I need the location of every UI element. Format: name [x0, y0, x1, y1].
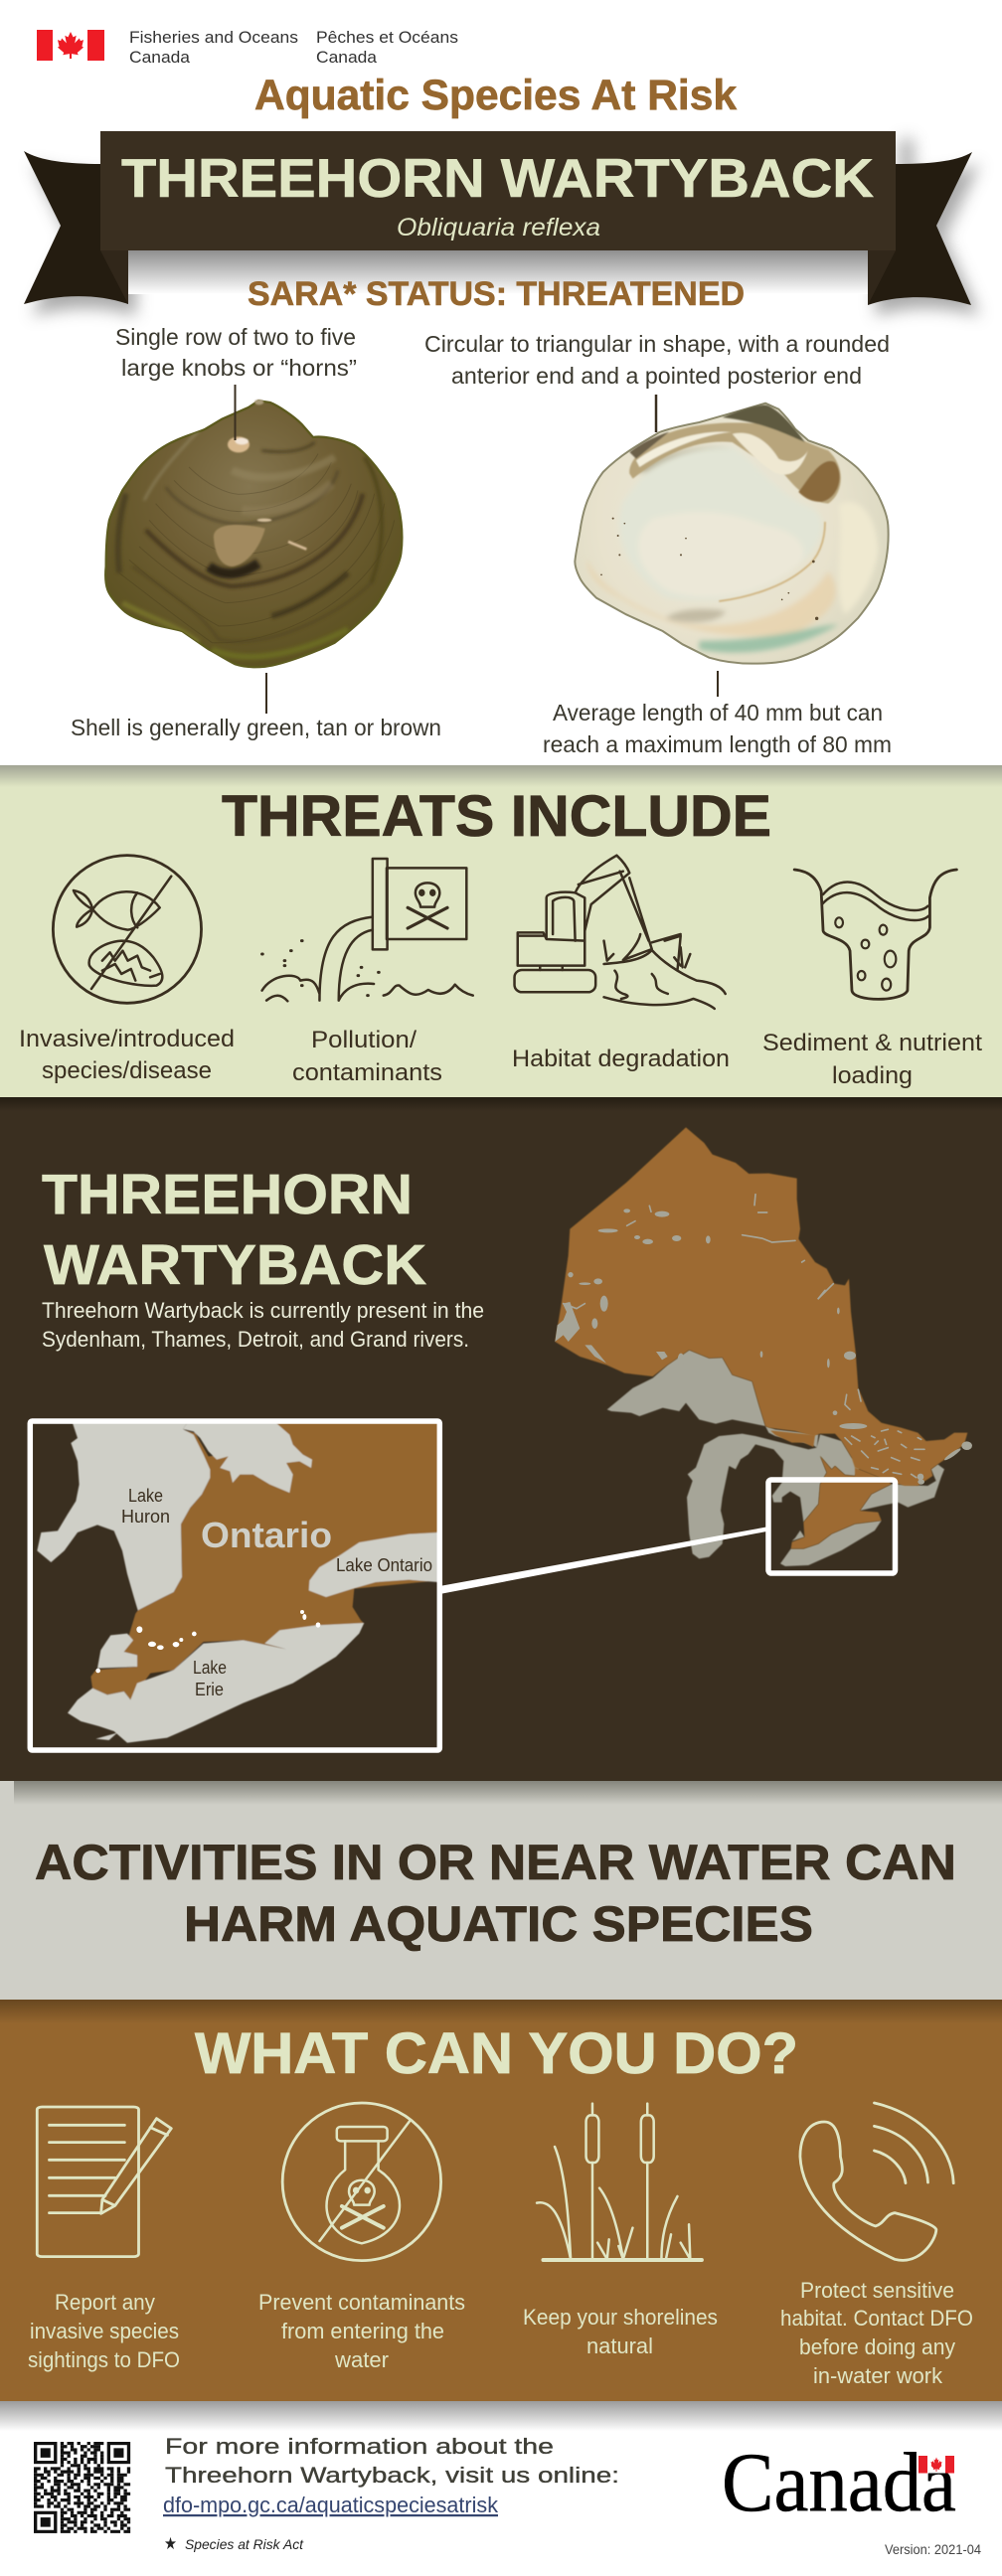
icon: telephone — [800, 2103, 953, 2260]
footnote: ★ — [164, 2534, 177, 2553]
Lake Superior — [607, 1350, 765, 1426]
Lake Ontario — [309, 1532, 438, 1597]
inset map — [30, 1421, 439, 1750]
inland lakes — [555, 1208, 972, 1485]
icon: invasive species — [53, 856, 202, 1003]
more information text — [165, 2434, 619, 2488]
Canada wordmark: Canada — [722, 2436, 956, 2529]
map description: Sydenham, Thames, Detroit, and Grand rivers. — [42, 1327, 469, 1352]
map heading — [42, 1163, 426, 1297]
action label: report: invasive species — [30, 2319, 179, 2343]
photo: shell exterior — [105, 400, 402, 667]
ribbon right — [868, 152, 972, 305]
annotation: length: Average length of 40 mm but can — [553, 700, 883, 725]
inset land — [90, 1423, 438, 1699]
annotation: horns: Single row of two to five — [115, 324, 356, 350]
annotation: length — [543, 671, 892, 757]
threat label: habitat: Habitat degradation — [512, 1046, 730, 1072]
icon: wordmark flag — [918, 2456, 954, 2473]
annotation: horns — [115, 324, 357, 440]
status heading: SARA* STATUS: THREATENED — [248, 275, 745, 313]
footer shadow — [0, 2401, 1002, 2431]
annotation: shape: Circular to triangular in shape, with a rounded — [424, 331, 890, 357]
icon: cattails — [537, 2104, 702, 2260]
icon: sediment — [794, 870, 956, 999]
threat label: invasive — [19, 1026, 235, 1084]
action label: habitat — [780, 2278, 973, 2388]
threat label: invasive: species/disease — [42, 1057, 212, 1084]
action label: prevent — [258, 2290, 465, 2372]
action label: prevent: Prevent contaminants — [258, 2290, 465, 2315]
locator box — [768, 1480, 895, 1573]
department name English: Fisheries and Oceans — [129, 29, 298, 47]
threat label: pollution: Pollution/ — [311, 1027, 417, 1053]
icon: excavator — [515, 856, 726, 1009]
icon: note and pencil — [37, 2107, 171, 2257]
annotation: shape: anterior end and a pointed posterior end — [451, 363, 862, 389]
message text: ACTIVITIES IN OR NEAR WATER CAN — [35, 1835, 956, 1890]
message text: HARM AQUATIC SPECIES — [184, 1896, 813, 1952]
annotation: horns: large knobs or “horns” — [121, 355, 357, 381]
footnote: Species at Risk Act — [185, 2536, 304, 2552]
action label: habitat: before doing any — [799, 2334, 955, 2359]
action label: shorelines — [523, 2305, 718, 2358]
QR code — [34, 2444, 130, 2531]
title banner with ribbon — [24, 131, 980, 316]
occurrence points — [95, 1610, 320, 1673]
label: Lake Erie — [193, 1658, 227, 1699]
department name French: Canada — [316, 49, 378, 67]
action label: habitat: habitat. Contact DFO — [780, 2306, 973, 2331]
southwestern Ontario — [770, 1430, 892, 1548]
icon: Canadian flag — [37, 30, 104, 61]
label: Lake Ontario: Lake Ontario — [336, 1555, 432, 1575]
label: Lake Erie: Erie — [195, 1680, 224, 1699]
map description: Threehorn Wartyback is currently present in the — [42, 1298, 484, 1323]
map heading: WARTYBACK — [44, 1233, 426, 1297]
action label: shorelines: Keep your shorelines — [523, 2305, 718, 2330]
photo: shell interior — [575, 403, 889, 664]
department name English: Canada — [129, 49, 191, 67]
action label: prevent: water — [334, 2347, 389, 2372]
label: Lake Huron — [121, 1486, 170, 1527]
map: Ontario and Great Lakes — [555, 1127, 972, 1566]
connector line — [442, 1527, 766, 1594]
label: Lake Huron: Huron — [121, 1507, 170, 1527]
threat label: invasive: Invasive/introduced — [19, 1026, 235, 1052]
species name: THREEHORN WARTYBACK — [121, 147, 874, 209]
label: Lake Erie: Lake — [193, 1658, 227, 1678]
Lake Huron — [37, 1423, 210, 1610]
threat label: pollution — [292, 1027, 442, 1086]
map description — [42, 1298, 484, 1352]
annotation: shape — [424, 331, 890, 432]
scientific name: Obliquaria reflexa — [397, 214, 600, 242]
threats heading: THREATS INCLUDE — [222, 784, 771, 849]
actions heading: WHAT CAN YOU DO? — [195, 2021, 798, 2086]
more information text: Threehorn Wartyback, visit us online: — [165, 2463, 619, 2488]
panel: activities message — [0, 1781, 1002, 2000]
Lake St Clair — [97, 1634, 137, 1669]
department name English — [129, 29, 298, 67]
panel: distribution map — [0, 1097, 1002, 1781]
action label: shorelines: natural — [586, 2334, 653, 2358]
threat label: sediment: loading — [832, 1062, 913, 1089]
label: Ontario: Ontario — [201, 1515, 332, 1555]
action label: habitat: in-water work — [813, 2363, 943, 2388]
action label: report: sightings to DFO — [28, 2347, 180, 2372]
threat label: sediment — [762, 1030, 982, 1089]
action label: report: Report any — [55, 2290, 155, 2315]
action label: habitat: Protect sensitive — [800, 2278, 954, 2303]
threat label: pollution: contaminants — [292, 1059, 442, 1086]
department name French: Pêches et Océans — [316, 29, 458, 47]
message text — [35, 1835, 956, 1952]
panel: threats — [0, 765, 1002, 1097]
Georgian Bay — [183, 1423, 312, 1493]
action label: report — [28, 2290, 180, 2372]
map heading: THREEHORN — [42, 1163, 413, 1226]
department name French — [316, 29, 458, 67]
lower Great Lakes — [687, 1426, 944, 1566]
panel: what can you do — [0, 2000, 1002, 2401]
label: Lake Huron: Lake — [128, 1486, 163, 1506]
Ontario land — [555, 1127, 967, 1486]
website link: dfo-mpo.gc.ca/aquaticspeciesatrisk — [163, 2493, 499, 2517]
annotation: length: reach a maximum length of 80 mm — [543, 731, 892, 757]
icon: no contaminants — [282, 2103, 441, 2261]
header: government identifier — [37, 29, 458, 67]
version: Version: 2021-04 — [885, 2541, 981, 2557]
annotation: colour: Shell is generally green, tan or brown — [71, 715, 441, 740]
ribbon left — [24, 151, 128, 304]
heading: Aquatic Species At Risk: Aquatic Species At Risk — [254, 72, 737, 119]
threat label: sediment: Sediment & nutrient — [762, 1030, 982, 1056]
action label: prevent: from entering the — [281, 2319, 444, 2343]
more information text: For more information about the — [165, 2434, 554, 2459]
Lake Erie — [68, 1623, 364, 1743]
icon: pollution — [262, 859, 473, 1001]
